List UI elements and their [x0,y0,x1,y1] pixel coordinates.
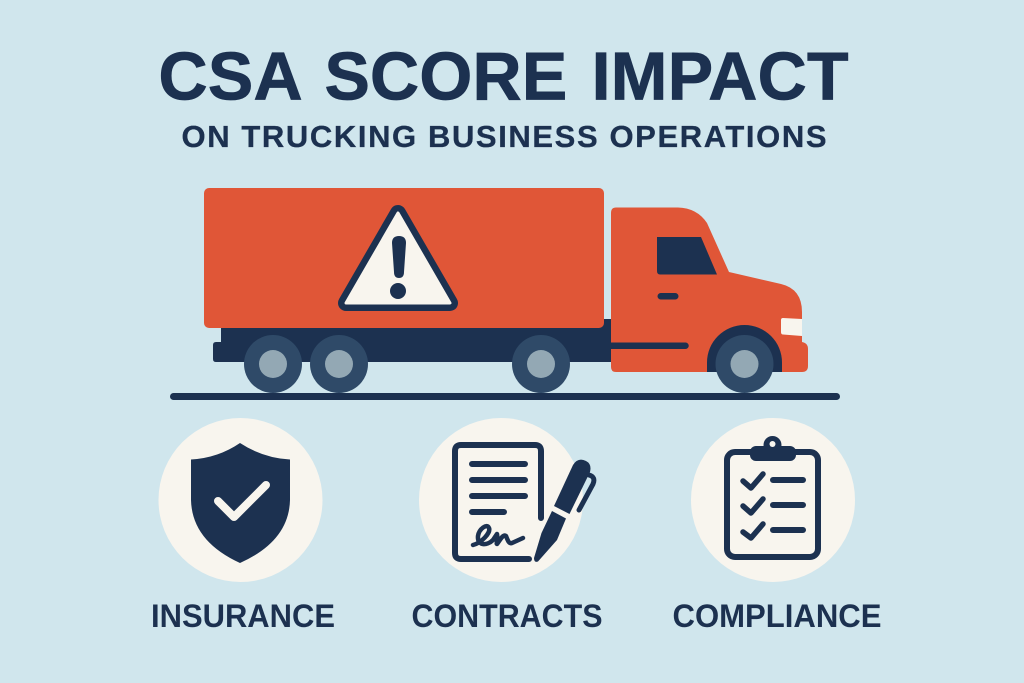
subtitle: ON TRUCKING BUSINESS OPERATIONS [182,119,826,154]
wheel 3 [512,335,570,393]
chassis [213,319,615,362]
compliance icon [691,418,855,582]
wheel 4 [716,335,774,393]
clipboard [727,452,818,557]
road line [170,393,840,400]
signature [473,526,523,545]
clip [750,436,796,461]
warning triangle icon [346,213,450,303]
truck illustration [204,188,808,393]
checklist [743,474,763,538]
cab window [657,237,717,274]
pen [534,460,594,562]
contracts icon [419,418,594,582]
headlight [781,318,802,336]
title: CSA SCORE IMPACT [158,38,848,114]
wheel 1 [244,335,302,393]
insurance icon [158,418,322,582]
insurance label: INSURANCE [151,598,335,634]
cab [611,208,808,372]
compliance label: COMPLIANCE [672,598,882,634]
cab stripe [611,342,689,349]
contracts label: CONTRACTS [412,598,602,634]
wheel arch [707,325,782,372]
door handle [658,293,678,300]
text lines [472,464,525,512]
cargo box [204,188,604,328]
document outline [455,445,541,559]
wheel 2 [310,335,368,393]
